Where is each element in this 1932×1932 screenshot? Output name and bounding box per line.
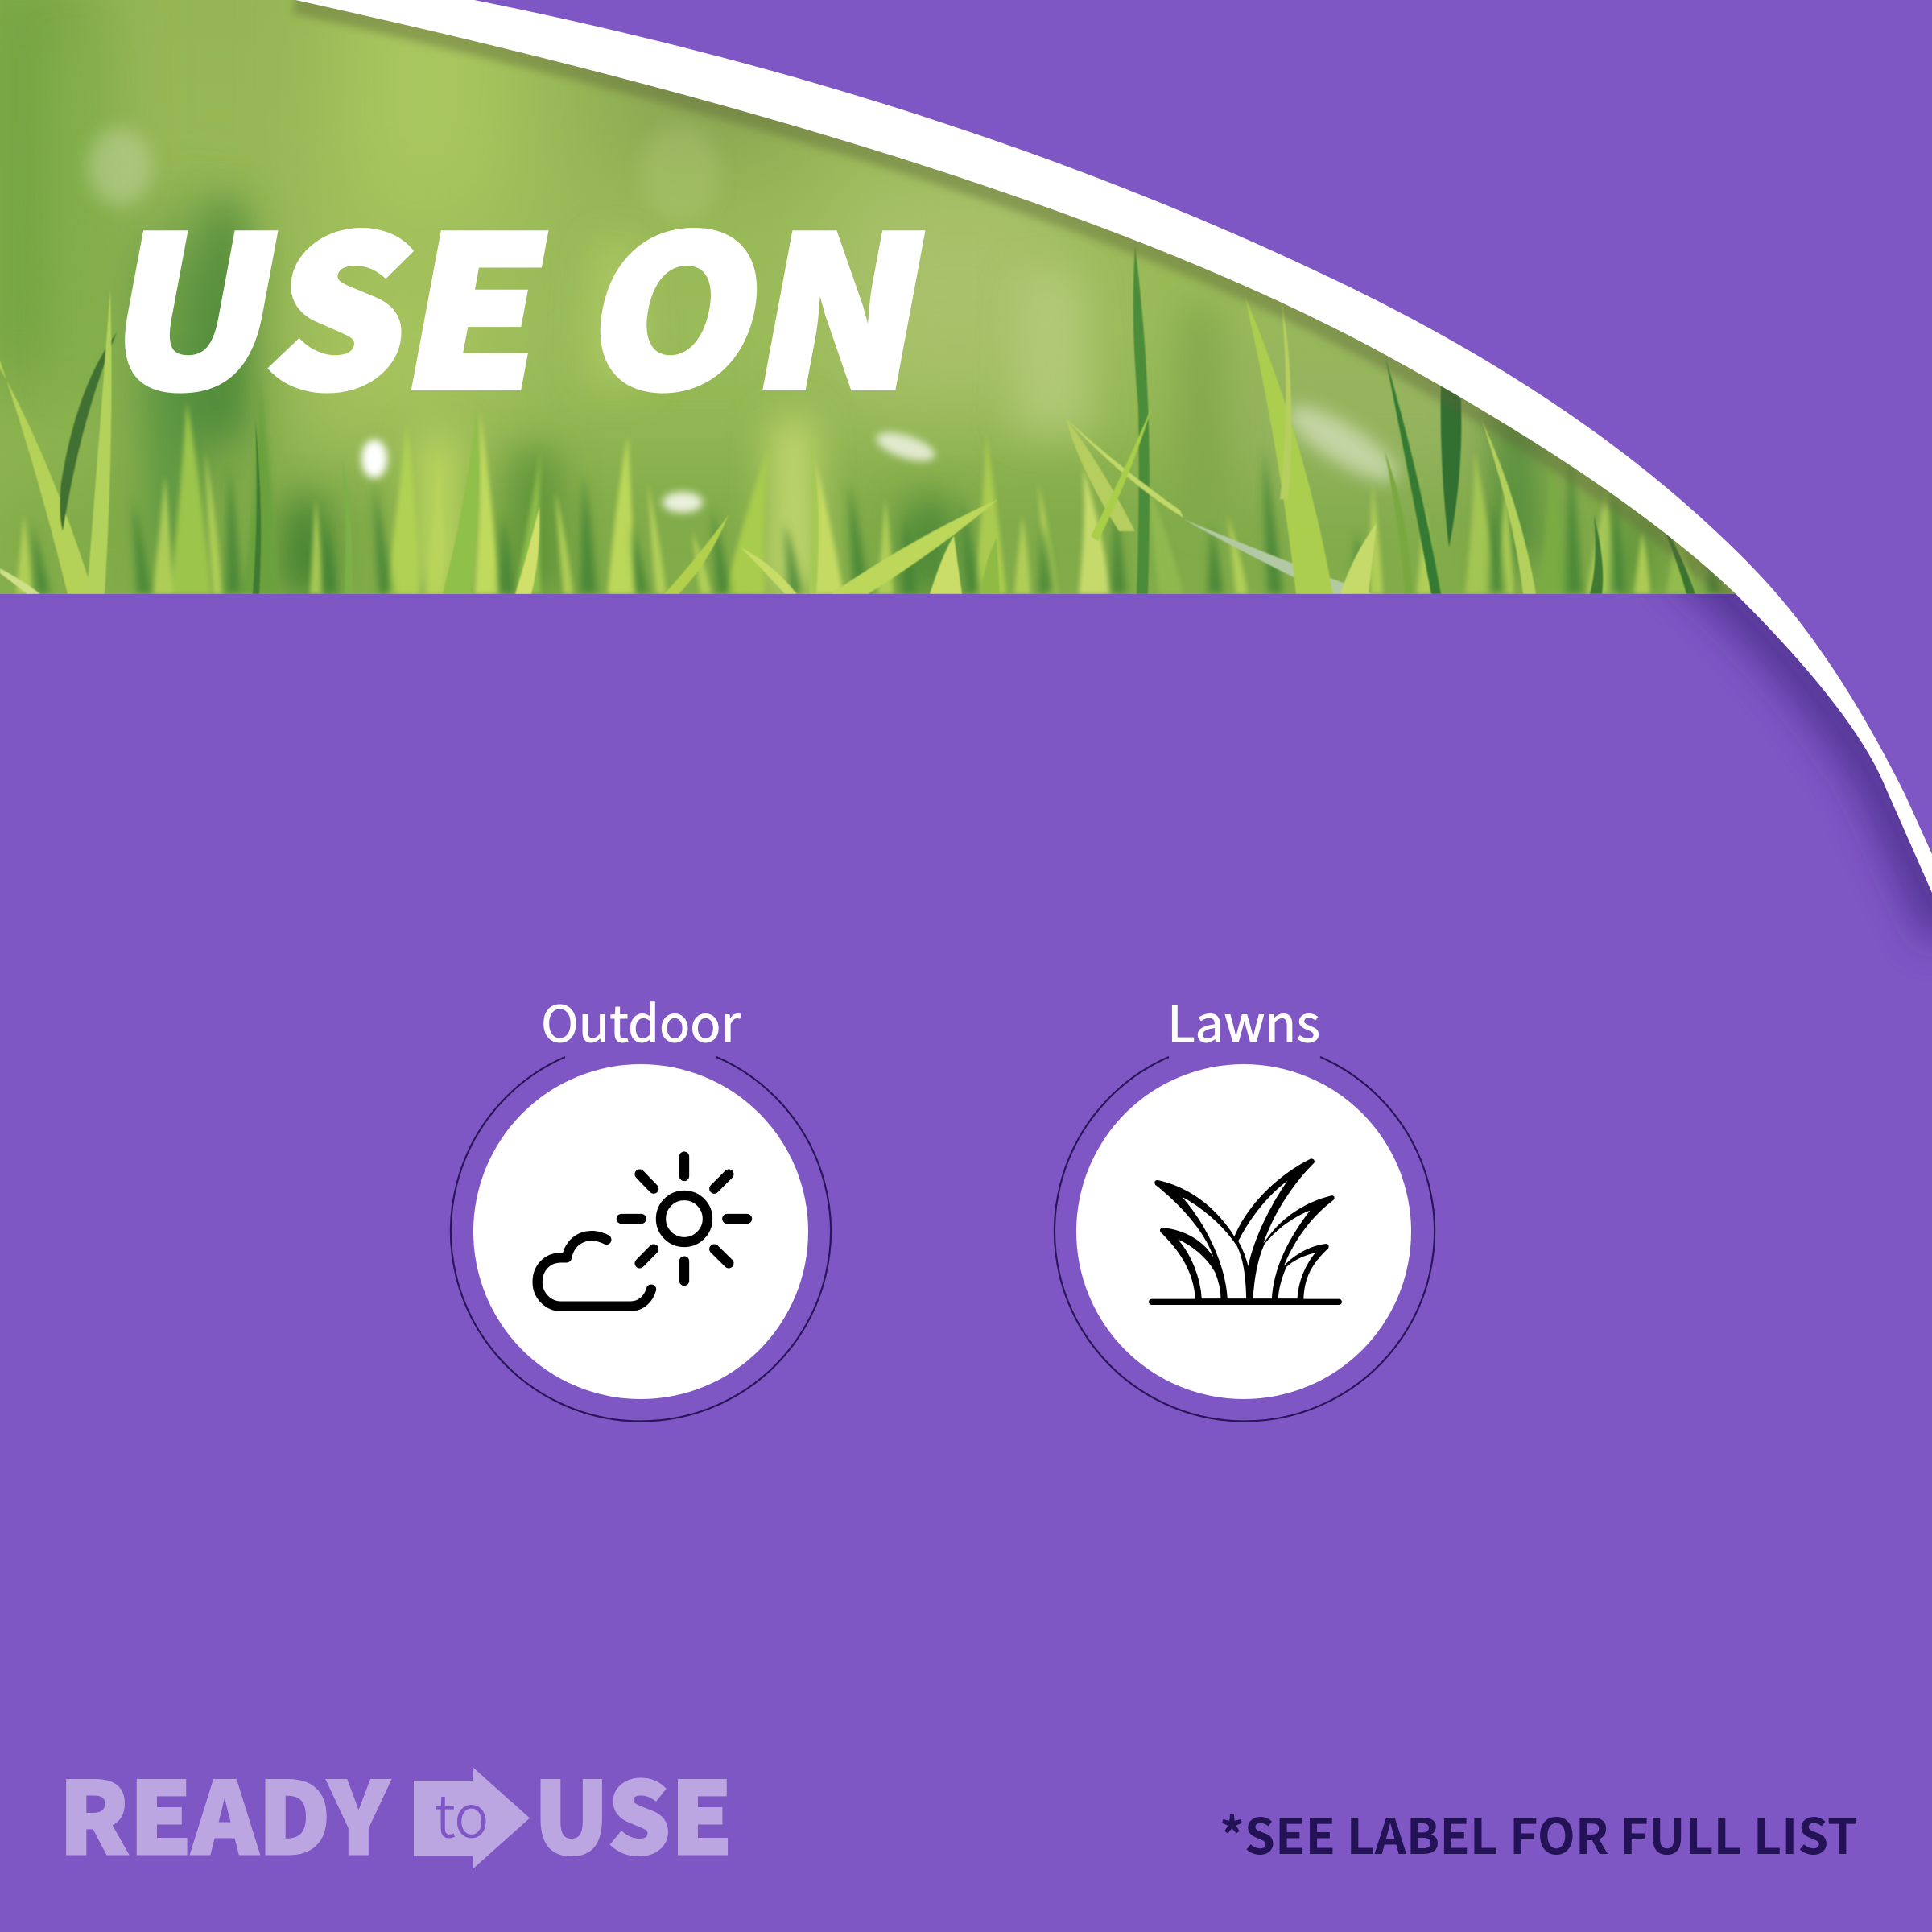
logo: ready to use: [59, 1740, 733, 1883]
word: USE: USE: [534, 1740, 733, 1883]
arrow with to: to: [435, 1769, 489, 1854]
word: READY: READY: [59, 1740, 390, 1883]
white circle: [473, 1064, 808, 1399]
outdoor item: [451, 984, 831, 1421]
lawns item: [1055, 984, 1435, 1421]
curved shadow under the swoosh: [1682, 547, 1932, 934]
label: Outdoor: Outdoor: [541, 984, 741, 1056]
ring: [1055, 1057, 1435, 1421]
sharp foreground blades: [0, 246, 1695, 594]
ring: [451, 1057, 831, 1421]
bokeh highlights: [88, 125, 1408, 494]
footnote: *SEE LABEL FOR FULL LIST: [1220, 1797, 1858, 1868]
icon: grass: [1152, 1158, 1339, 1302]
white circle: [1076, 1064, 1411, 1399]
icon: sun and cloud: [538, 1157, 747, 1307]
arrow with to: [414, 1767, 530, 1869]
soft mid-ground blades: [16, 378, 1695, 594]
soft edge on photo beside swoosh: [295, 0, 1736, 594]
label: Lawns: Lawns: [1167, 984, 1320, 1056]
title: USE ON: USE ON: [89, 149, 956, 447]
white swoosh band: [295, 0, 1932, 893]
grass photo banner: [0, 0, 1932, 604]
